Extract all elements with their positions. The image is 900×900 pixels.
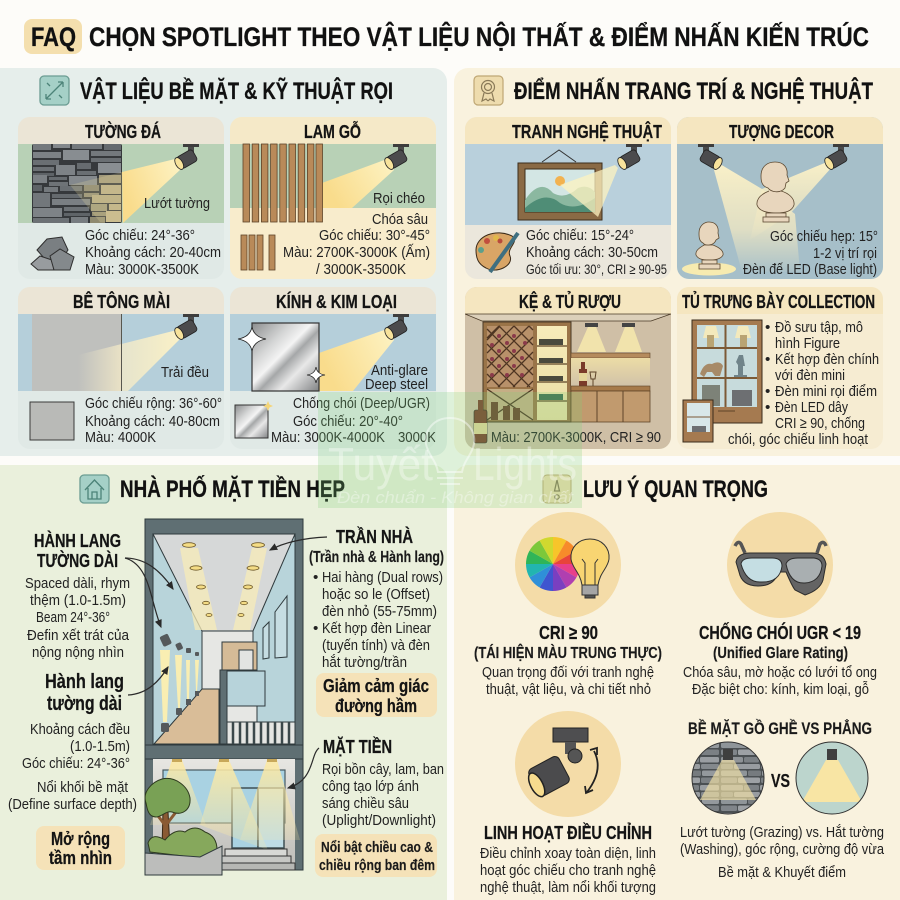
card: bê tông mài: Khoảng cách: 40-80cm bbox=[85, 413, 220, 430]
card: tường đá: Góc chiếu: 24°-36° bbox=[85, 227, 195, 244]
badge: nổi bật chiều cao: Nổi bật chiều cao & bbox=[321, 839, 433, 856]
card: tủ trưng bày collection: • bbox=[765, 399, 770, 416]
callout: mặt tiền: Rọi bồn cây, lam, ban bbox=[322, 761, 444, 778]
card: bê tông mài: Trải đều bbox=[161, 364, 209, 381]
item: bề mặt gồ ghề vs phẳng bbox=[680, 719, 884, 881]
callout: trần nhà: • bbox=[313, 620, 318, 637]
panel: điểm nhấn trang trí bbox=[454, 68, 900, 456]
card: lam gỗ: Góc chiếu: 30°-45° bbox=[319, 227, 430, 244]
card: kính & kim loại: 3000K bbox=[398, 429, 436, 446]
card: tượng decor: 1-2 vị trí rọi bbox=[813, 245, 877, 262]
badge: giảm cảm giác đường hầm bbox=[316, 673, 437, 717]
card: tủ trưng bày collection: • bbox=[765, 319, 770, 336]
callout: trần nhà: Hai hàng (Dual rows) bbox=[322, 569, 443, 586]
callout: hành lang tường dài: TƯỜNG DÀI bbox=[37, 550, 118, 571]
card: tường đá: TƯỜNG ĐÁ bbox=[85, 121, 161, 142]
item: CRI: CRI ≥ 90 bbox=[539, 622, 598, 643]
card: bê tông mài bbox=[18, 287, 224, 449]
card: tượng decor: Góc chiếu hẹp: 15° bbox=[770, 228, 878, 245]
callout: hành lang tường dài chi tiết bbox=[8, 671, 137, 813]
callout: trần nhà: • bbox=[313, 569, 318, 586]
card: tủ trưng bày collection: với đèn mini bbox=[775, 367, 845, 384]
card: tủ trưng bày collection: Đồ sưu tập, mô bbox=[775, 319, 863, 336]
callout: hành lang tường dài bbox=[25, 530, 130, 661]
card: tủ trưng bày collection bbox=[677, 287, 883, 449]
callout: mặt tiền: (Uplight/Downlight) bbox=[322, 812, 436, 829]
item: bề mặt gồ ghề vs phẳng: VS bbox=[771, 770, 790, 791]
item: linh hoạt điều chỉnh: Điều chỉnh xoay toàn diện, linh bbox=[480, 845, 656, 862]
card: lam gỗ bbox=[230, 117, 436, 279]
card: lam gỗ: Rọi chéo bbox=[373, 190, 425, 207]
callout: mặt tiền: sáng chiều sâu bbox=[322, 795, 409, 812]
card: kính & kim loại: Anti-glare bbox=[371, 362, 428, 379]
callout: hành lang tường dài: Spaced dàli, rhym bbox=[25, 575, 130, 592]
item: linh hoạt điều chỉnh: LINH HOẠT ĐIỀU CHỈNH bbox=[484, 822, 652, 843]
badge: giảm cảm giác đường hầm: đường hầm bbox=[335, 695, 417, 716]
callout: mặt tiền bbox=[322, 736, 444, 829]
card: tượng decor bbox=[677, 117, 883, 279]
upper floor bbox=[153, 534, 295, 745]
item: bề mặt gồ ghề vs phẳng: Bề mặt & Khuyết điểm bbox=[718, 864, 846, 881]
callout: mặt tiền: MẶT TIỀN bbox=[323, 736, 392, 757]
item: CRI: (TÁI HIỆN MÀU TRUNG THỰC) bbox=[474, 643, 662, 662]
icon: adjustable spotlight bbox=[523, 728, 598, 799]
card: kệ & tủ rượu: Màu: 2700K-3000K, CRI ≥ 90 bbox=[491, 429, 661, 446]
card: lam gỗ: Màu: 2700K-3000K (Ấm) bbox=[283, 244, 430, 261]
callout: trần nhà: (tuyến tính) và đèn bbox=[322, 637, 430, 654]
icon: colour wheel bbox=[526, 537, 578, 591]
watermark: Tuyết bbox=[328, 438, 433, 490]
card: bê tông mài: BÊ TÔNG MÀI bbox=[73, 291, 170, 312]
callout: hành lang tường dài chi tiết: (1.0-1.5m) bbox=[70, 738, 130, 755]
card: tủ trưng bày collection: Kết hợp đèn chính bbox=[775, 351, 879, 368]
icon: exclamation bbox=[543, 475, 571, 503]
card: kệ & tủ rượu: KỆ & TỦ RƯỢU bbox=[519, 291, 621, 312]
callout: hành lang tường dài: Beam 24°-36° bbox=[36, 609, 110, 626]
card: tủ trưng bày collection: • bbox=[765, 351, 770, 368]
item: chống chói bbox=[683, 512, 877, 698]
callout: hành lang tường dài: HÀNH LANG bbox=[34, 530, 121, 551]
item: CRI: thuật, vật liệu, và chi tiết nhỏ bbox=[486, 681, 651, 698]
illustration: building cross-section bbox=[145, 519, 303, 870]
callout: trần nhà: Kết hợp đèn Linear bbox=[322, 620, 431, 637]
FAQ badge: FAQ bbox=[31, 22, 76, 52]
icon: palette bbox=[476, 233, 518, 272]
card: tủ trưng bày collection: hình Figure bbox=[775, 335, 840, 352]
illustration: tree and planter bbox=[145, 778, 222, 875]
callout: hành lang tường dài chi tiết: tường dài bbox=[47, 693, 122, 715]
badge: nổi bật chiều cao: chiều rộng ban đêm bbox=[319, 857, 435, 874]
ground floor bbox=[150, 759, 300, 870]
card: kính & kim loại: Chống chói (Deep/UGR) bbox=[293, 395, 430, 412]
badge: mở rộng tầm nhìn: Mở rộng bbox=[51, 828, 110, 849]
badge: giảm cảm giác đường hầm: Giảm cảm giác bbox=[323, 675, 429, 696]
arrows bbox=[125, 537, 327, 788]
badge: mở rộng tầm nhìn bbox=[36, 826, 125, 870]
header bbox=[24, 19, 869, 54]
icon: bust large bbox=[757, 162, 794, 222]
heading: LƯU Ý QUAN TRỌNG bbox=[583, 475, 768, 503]
card: tủ trưng bày collection: Đèn LED dây bbox=[775, 399, 848, 416]
item: linh hoạt điều chỉnh bbox=[480, 711, 656, 896]
icon: expand arrows bbox=[40, 76, 69, 105]
card: tủ trưng bày collection: CRI ≥ 90, chống bbox=[775, 415, 865, 432]
watermark bbox=[318, 392, 582, 508]
callout: trần nhà: hoặc so le (Offset) bbox=[322, 586, 430, 603]
callout: mặt tiền: công tạo lớp ánh bbox=[322, 778, 419, 795]
item: chống chói: (Unified Glare Rating) bbox=[713, 645, 848, 662]
card: lam gỗ: Chóa sâu bbox=[372, 211, 428, 228]
icon: bust small bbox=[696, 222, 723, 269]
card: kính & kim loại bbox=[230, 287, 436, 449]
card: lam gỗ: / 3000K-3500K bbox=[316, 261, 406, 278]
callout: hành lang tường dài: thệm (1.0-1.5m) bbox=[30, 592, 126, 609]
icon: wine bottle bbox=[474, 400, 487, 443]
icon: light bulb bbox=[571, 539, 609, 598]
illustration: stone wall bbox=[32, 144, 122, 223]
icon: rocks bbox=[31, 237, 74, 270]
card: kính & kim loại: Màu: 3000K-4000K bbox=[271, 429, 385, 446]
card: tranh nghệ thuật: Góc tối ưu: 30°, CRI ≥ 90-95 bbox=[526, 261, 667, 277]
item: linh hoạt điều chỉnh: nghệ thuật, làm nổi khối tượng bbox=[480, 879, 656, 896]
illustration: display cabinet bbox=[692, 320, 762, 423]
panel: vật liệu bề mặt bbox=[0, 68, 447, 456]
panel: lưu ý quan trọng bbox=[454, 465, 900, 900]
card: kính & kim loại: KÍNH & KIM LOẠI bbox=[276, 291, 397, 312]
illustration: wine rack bbox=[483, 322, 571, 422]
item: CRI bbox=[474, 512, 662, 698]
card: tranh nghệ thuật: Góc chiếu: 15°-24° bbox=[526, 227, 634, 244]
card: tường đá bbox=[18, 117, 224, 279]
badge: nổi bật chiều cao bbox=[315, 834, 437, 877]
card: kệ & tủ rượu bbox=[465, 287, 671, 449]
card: tranh nghệ thuật bbox=[465, 117, 671, 279]
icon: house bbox=[80, 475, 109, 503]
card: tranh nghệ thuật: Khoảng cách: 30-50cm bbox=[526, 244, 658, 261]
card: tường đá: Lướt tường bbox=[144, 195, 210, 212]
heading: VẬT LIỆU BỀ MẶT & KỸ THUẬT RỌI bbox=[80, 77, 393, 105]
card: tranh nghệ thuật: TRANH NGHỆ THUẬT bbox=[512, 121, 663, 142]
card: tủ trưng bày collection: • bbox=[765, 383, 770, 400]
card: bê tông mài: Màu: 4000K bbox=[85, 429, 156, 446]
callout: hành lang tường dài chi tiết: Hành lang bbox=[45, 671, 124, 693]
callout: trần nhà: TRẦN NHÀ bbox=[336, 526, 413, 547]
card: tường đá: Màu: 3000K-3500K bbox=[85, 261, 199, 278]
card: kính & kim loại: Góc chiếu: 20°-40° bbox=[293, 413, 403, 430]
icon: award rosette bbox=[474, 76, 503, 105]
card: tủ trưng bày collection: chói, góc chiếu linh hoạt bbox=[728, 431, 869, 448]
item: chống chói: Đặc biệt cho: kính, kim loại, gỗ bbox=[692, 681, 869, 698]
card: bê tông mài: Góc chiếu rộng: 36°-60° bbox=[85, 395, 222, 412]
card: tường đá: Khoảng cách: 20-40cm bbox=[85, 244, 221, 261]
card: tủ trưng bày collection: Đèn mini rọi điểm bbox=[775, 383, 877, 400]
card: lam gỗ: LAM GỖ bbox=[304, 121, 361, 142]
item: CRI: Quan trọng đối với tranh nghệ bbox=[482, 664, 654, 681]
watermark: Lights bbox=[473, 438, 577, 490]
callout: trần nhà: đèn nhỏ (55-75mm) bbox=[322, 603, 437, 620]
watermark: Đèn chuẩn - Không gian chất bbox=[337, 488, 574, 507]
panel: nhà phố mặt tiền hẹp bbox=[0, 465, 447, 900]
illustration: mini cabinet bbox=[683, 400, 713, 442]
callout: hành lang tường dài chi tiết: Khoảng cách đều bbox=[30, 721, 130, 738]
callout: trần nhà bbox=[309, 526, 444, 671]
callout: hành lang tường dài chi tiết: (Define surface depth) bbox=[8, 796, 137, 813]
icon: glasses bbox=[735, 542, 826, 595]
callout: hành lang tường dài: nộng nộng nhìn bbox=[32, 644, 124, 661]
callout: trần nhà: hắt tường/trần bbox=[322, 654, 407, 671]
swatch: concrete bbox=[30, 402, 74, 440]
callout: hành lang tường dài: Đefin xết trát của bbox=[27, 627, 129, 644]
heading: NHÀ PHỐ MẶT TIỀN HẸP bbox=[120, 475, 345, 503]
callout: trần nhà: (Trần nhà & Hành lang) bbox=[309, 549, 444, 566]
item: linh hoạt điều chỉnh: hoạt góc chiếu cho tranh nghệ bbox=[480, 862, 656, 879]
card: kính & kim loại: Deep steel bbox=[365, 376, 428, 393]
illustration: shelf and cabinet bbox=[571, 323, 650, 422]
callout: hành lang tường dài chi tiết: Góc chiếu: 24°-36° bbox=[22, 755, 130, 772]
badge: mở rộng tầm nhìn: tầm nhìn bbox=[49, 847, 112, 868]
callout: hành lang tường dài chi tiết: Nổi khối bề mặt bbox=[37, 779, 129, 796]
card: tượng decor: TƯỢNG DECOR bbox=[729, 121, 834, 142]
